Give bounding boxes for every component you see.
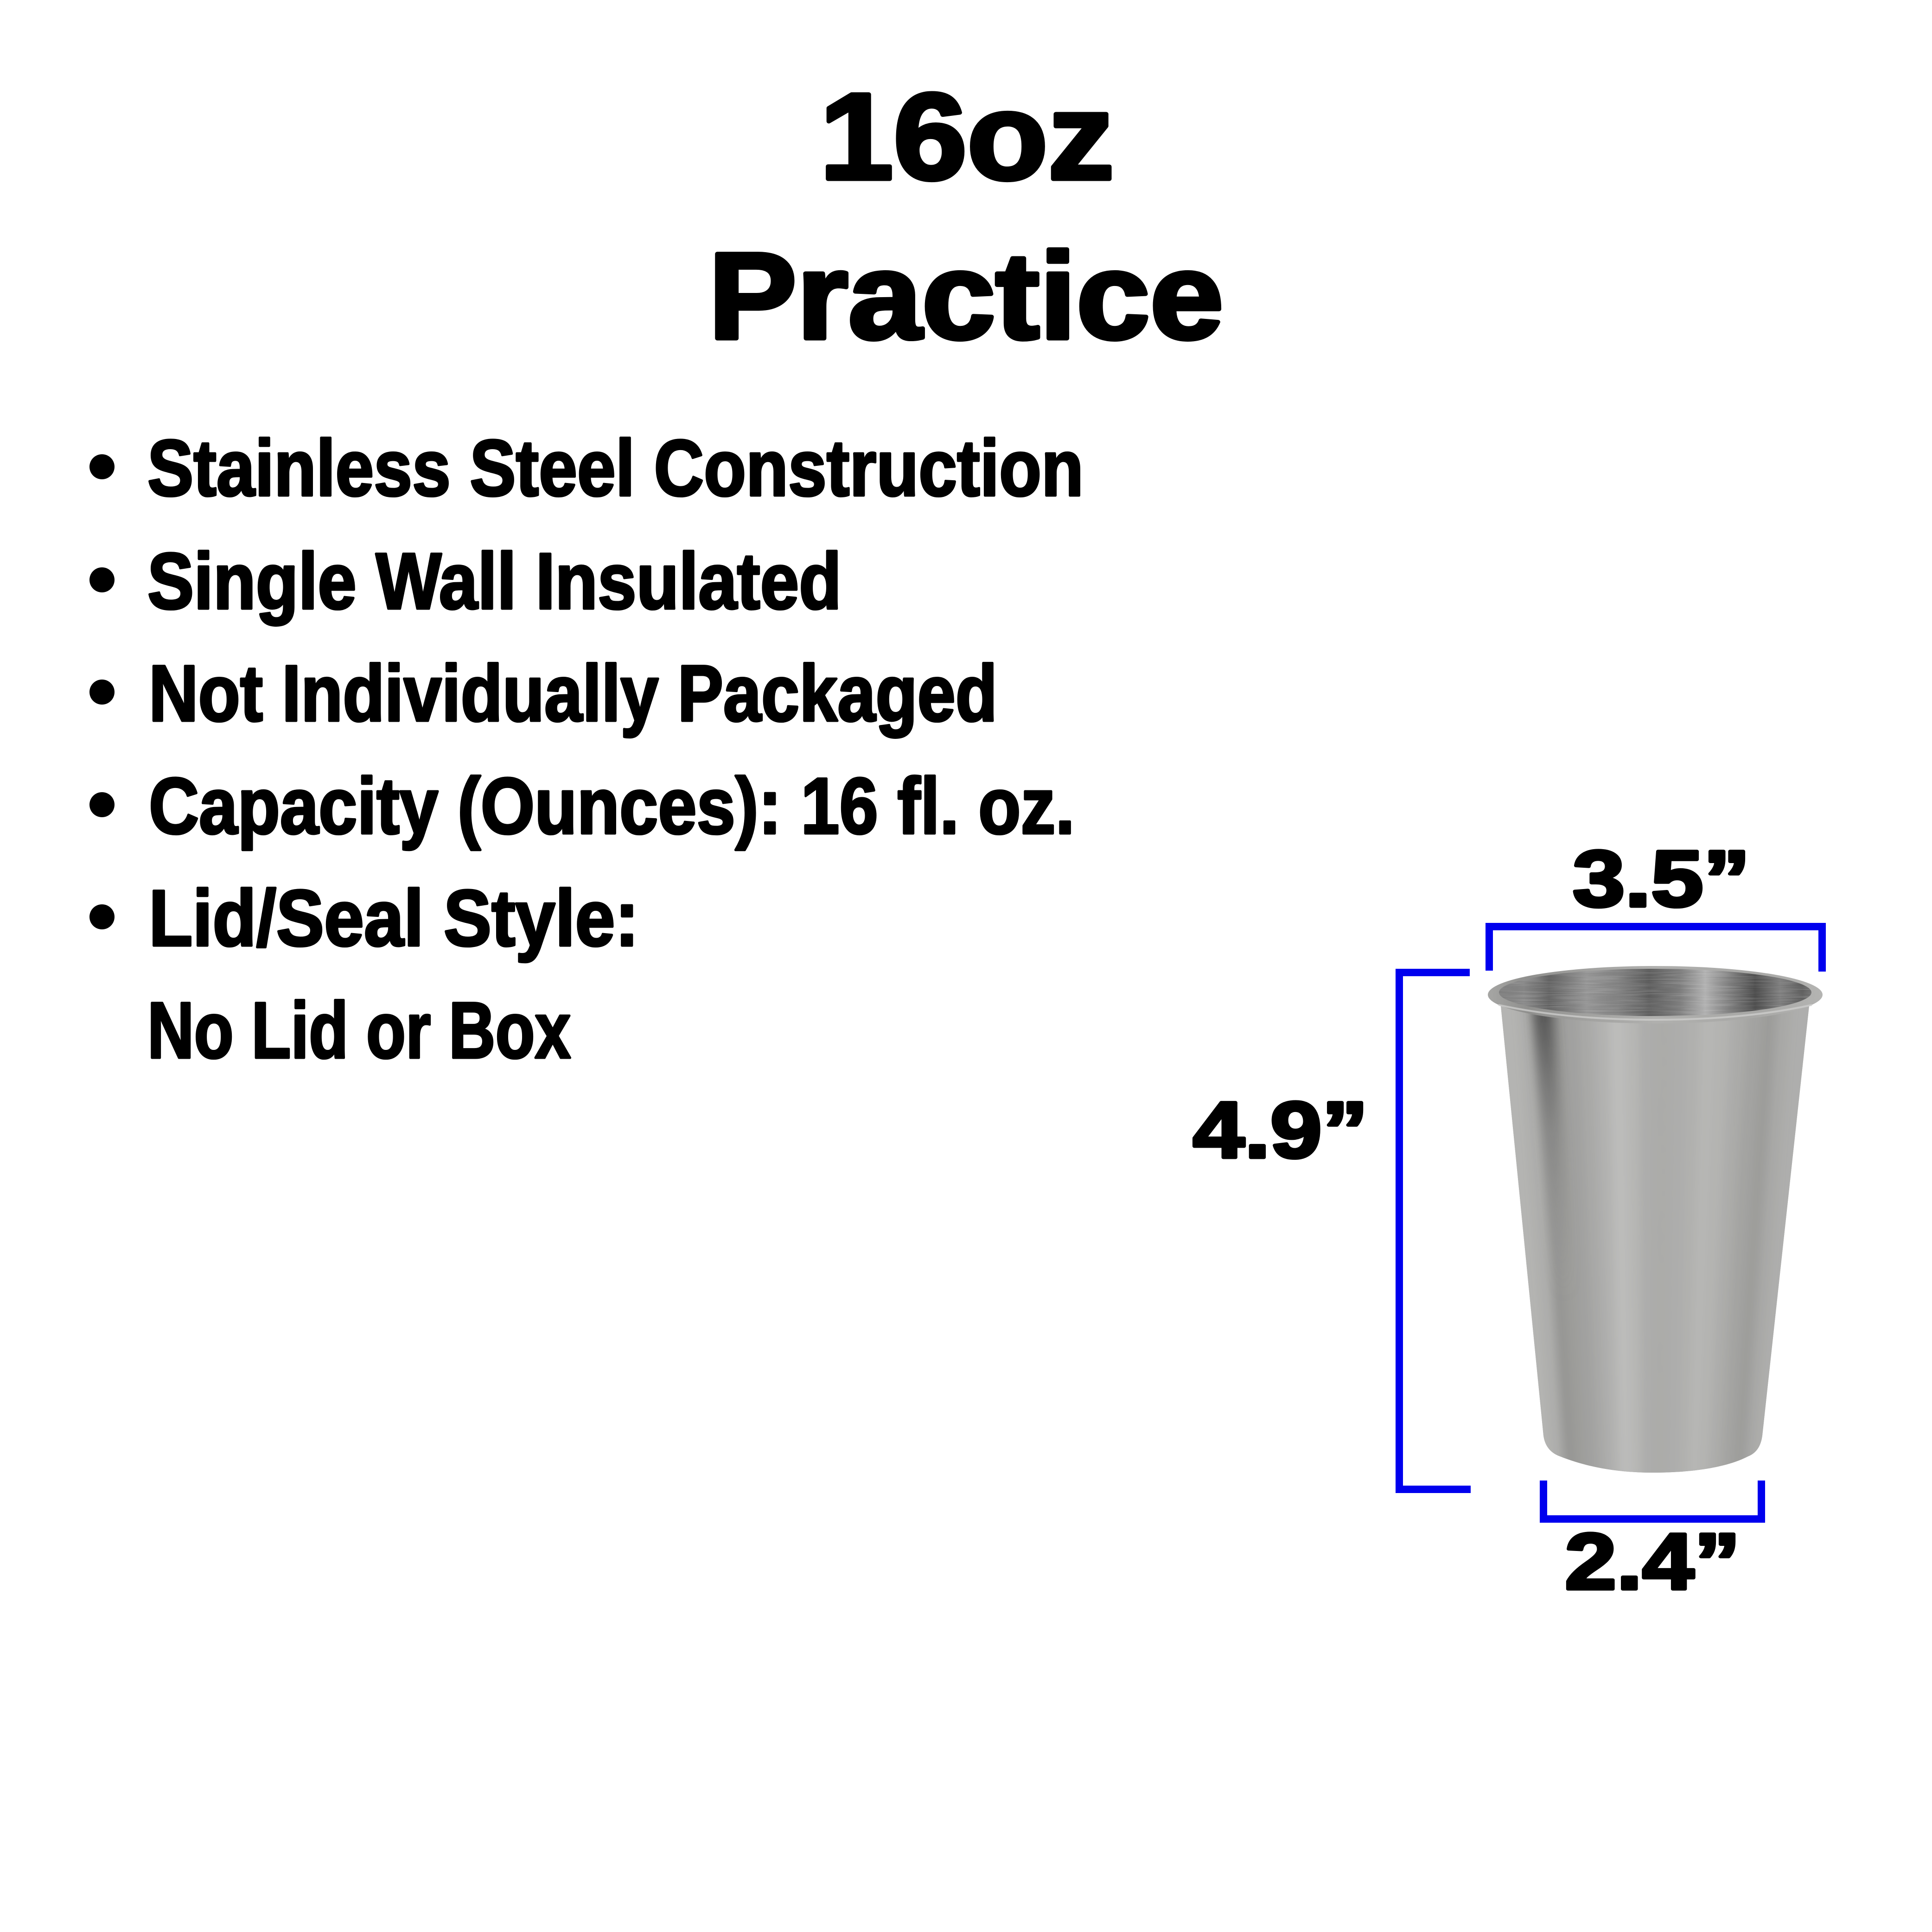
cup body xyxy=(1501,1006,1809,1473)
infographic canvas xyxy=(89,91,1826,1591)
bullet: lid and seal style: Lid/Seal Style: xyxy=(149,874,639,963)
title line: Practice: Practice xyxy=(708,228,1224,365)
label: 4.9 inches: 4.9” xyxy=(1193,1086,1368,1175)
bullet: capacity: Capacity (Ounces): 16 fl. oz. xyxy=(149,762,1075,851)
dimension bracket: height xyxy=(1193,972,1471,1489)
dimension bracket: top diameter xyxy=(1489,834,1822,972)
bullet: single wall: Single Wall Insulated xyxy=(147,537,842,626)
dimension bracket: base diameter xyxy=(1543,1481,1761,1606)
title xyxy=(708,68,1224,365)
label: 2.4 inches: 2.4” xyxy=(1565,1517,1741,1606)
cup interior xyxy=(1498,966,1813,1018)
bullet: lid and seal style: No Lid or Box xyxy=(147,986,571,1075)
bullet: lid and seal style xyxy=(89,874,639,1075)
stainless steel cup xyxy=(1474,966,1836,1479)
bullet: packaging: Not Individually Packaged xyxy=(149,649,997,738)
feature bullet list xyxy=(89,424,1084,1075)
bullet: stainless steel: Stainless Steel Construction xyxy=(147,424,1084,513)
label: 3.5 inches: 3.5” xyxy=(1573,834,1750,923)
title line: 16oz: 16oz xyxy=(820,68,1114,205)
cup rim xyxy=(1488,966,1823,1023)
